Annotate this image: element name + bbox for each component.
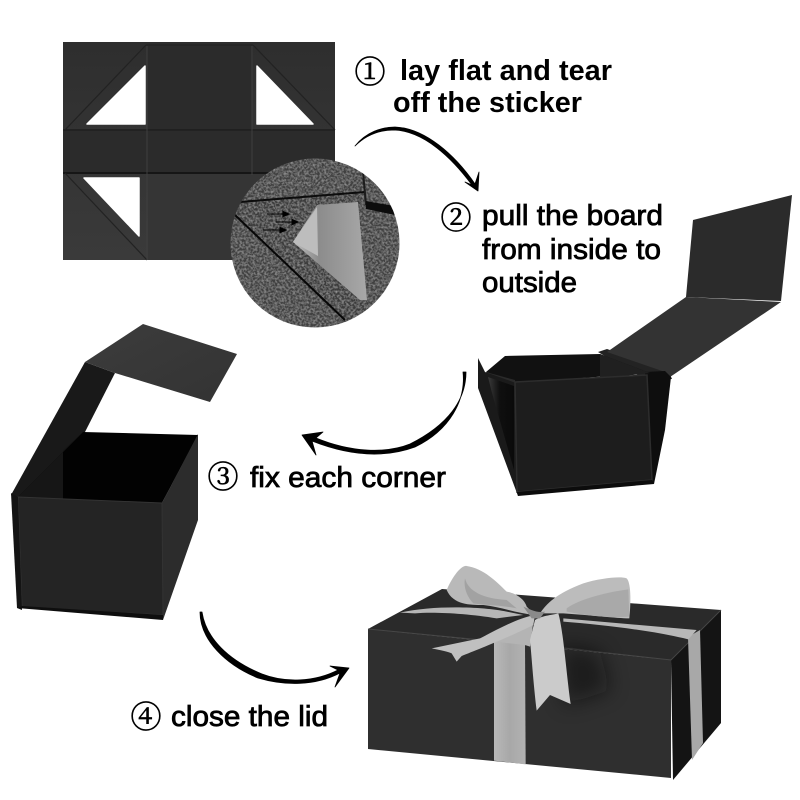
ribbon and bow (400, 566, 697, 764)
step 3 label: ③ (208, 452, 238, 497)
triangle cutout top right (257, 66, 313, 124)
top ribbon right (563, 618, 697, 639)
magnifier circle detail (230, 158, 400, 328)
bow left tail (432, 615, 535, 662)
left edge (11, 493, 22, 610)
open box with lid raised (11, 324, 237, 620)
lid upper panel (686, 195, 792, 301)
step 2 label (440, 193, 663, 299)
step 3 label (208, 452, 446, 497)
side ribbon (688, 630, 703, 760)
bow knot (523, 607, 545, 618)
step 4 label: ④ (130, 692, 162, 737)
lid top panel (85, 324, 237, 402)
lid lower panel (607, 297, 781, 377)
arrow 2 (302, 372, 466, 455)
ribbon shadow (560, 645, 610, 705)
step 4 label (130, 692, 328, 737)
right flap (645, 371, 671, 484)
vertical ribbon (494, 642, 526, 764)
step 1 label (354, 47, 612, 119)
bow right tail (530, 613, 571, 711)
front face (368, 629, 671, 778)
bow right loop (540, 577, 630, 618)
step 1 label: ① (354, 47, 386, 92)
triangle cutout top left (87, 66, 145, 124)
step 4 label: close the lid (171, 701, 328, 733)
flat unfolded box (63, 42, 335, 260)
step 3 label: fix each corner (250, 462, 446, 494)
bow left loop (447, 566, 535, 615)
step 1 label: lay flat and tear (400, 55, 612, 87)
right side wall (162, 434, 198, 620)
bottom edge (17, 606, 163, 620)
step 2 label: pull the board (482, 200, 663, 232)
top face (368, 589, 721, 660)
lid back panel (11, 362, 115, 499)
right side (671, 610, 721, 780)
front face (18, 497, 163, 615)
step 2 label: outside (482, 267, 577, 299)
front face (515, 375, 652, 492)
triangle cutout bottom left (84, 178, 139, 236)
left flap (478, 358, 518, 496)
interior (18, 432, 198, 503)
step 2 label: ② (440, 193, 472, 238)
interior (486, 354, 650, 383)
box with lid open, partially folded (478, 195, 792, 496)
closed gift box with ribbon (368, 566, 721, 780)
arrow 3 (200, 612, 349, 687)
bottom edge (517, 480, 654, 496)
step 1 label: off the sticker (393, 87, 582, 119)
top ribbon left (400, 607, 523, 618)
step 2 label: from inside to (482, 234, 661, 266)
small direction arrows (263, 212, 298, 232)
arrow 1 (355, 127, 479, 191)
